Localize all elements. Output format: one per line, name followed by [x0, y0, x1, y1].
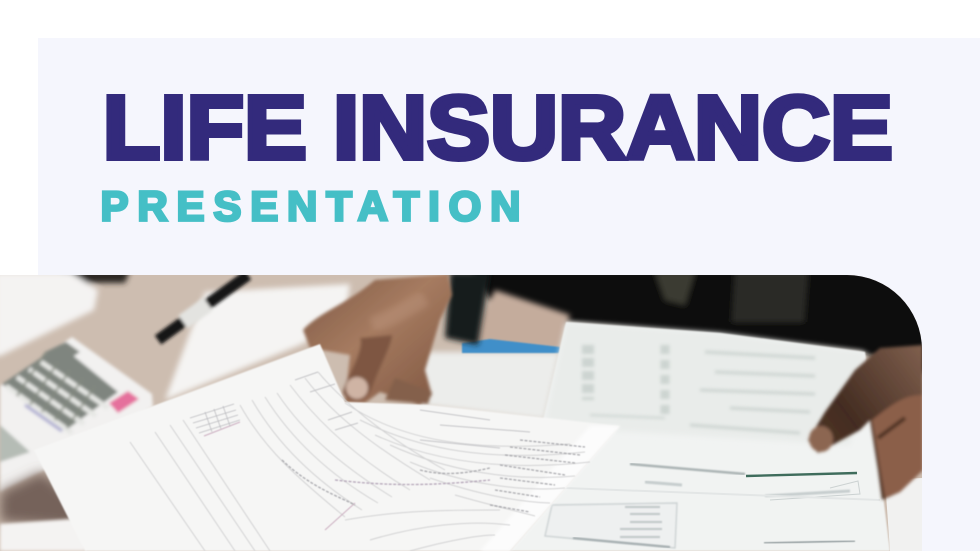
title: LIFE INSURANCE [103, 78, 893, 178]
form lines [130, 372, 590, 551]
right paper [510, 322, 890, 551]
blurred form lines [588, 345, 815, 433]
pink grid lines [204, 422, 355, 530]
dark clothing background [470, 270, 930, 375]
front document [34, 344, 620, 551]
bottom-left paper [0, 518, 86, 551]
dark lower-left desk [0, 465, 70, 525]
right hand [808, 345, 923, 500]
top-left blurred paper and objects [0, 270, 570, 420]
dense text rows [282, 440, 585, 512]
top-edge column text [295, 372, 530, 448]
left hand [303, 274, 452, 405]
account summary box [545, 503, 677, 548]
subtitle: PRESENTATION [100, 182, 520, 230]
bright curved right edge [481, 434, 613, 551]
pen [158, 275, 248, 340]
photo: hands holding insurance documents [0, 270, 930, 551]
printed lines and green rule [565, 464, 880, 543]
desk surface [0, 275, 922, 551]
calculator [0, 337, 153, 492]
blue folder strip [462, 339, 560, 353]
white table area right [885, 478, 922, 551]
left sleeve [445, 272, 490, 345]
small grid block [190, 404, 240, 433]
